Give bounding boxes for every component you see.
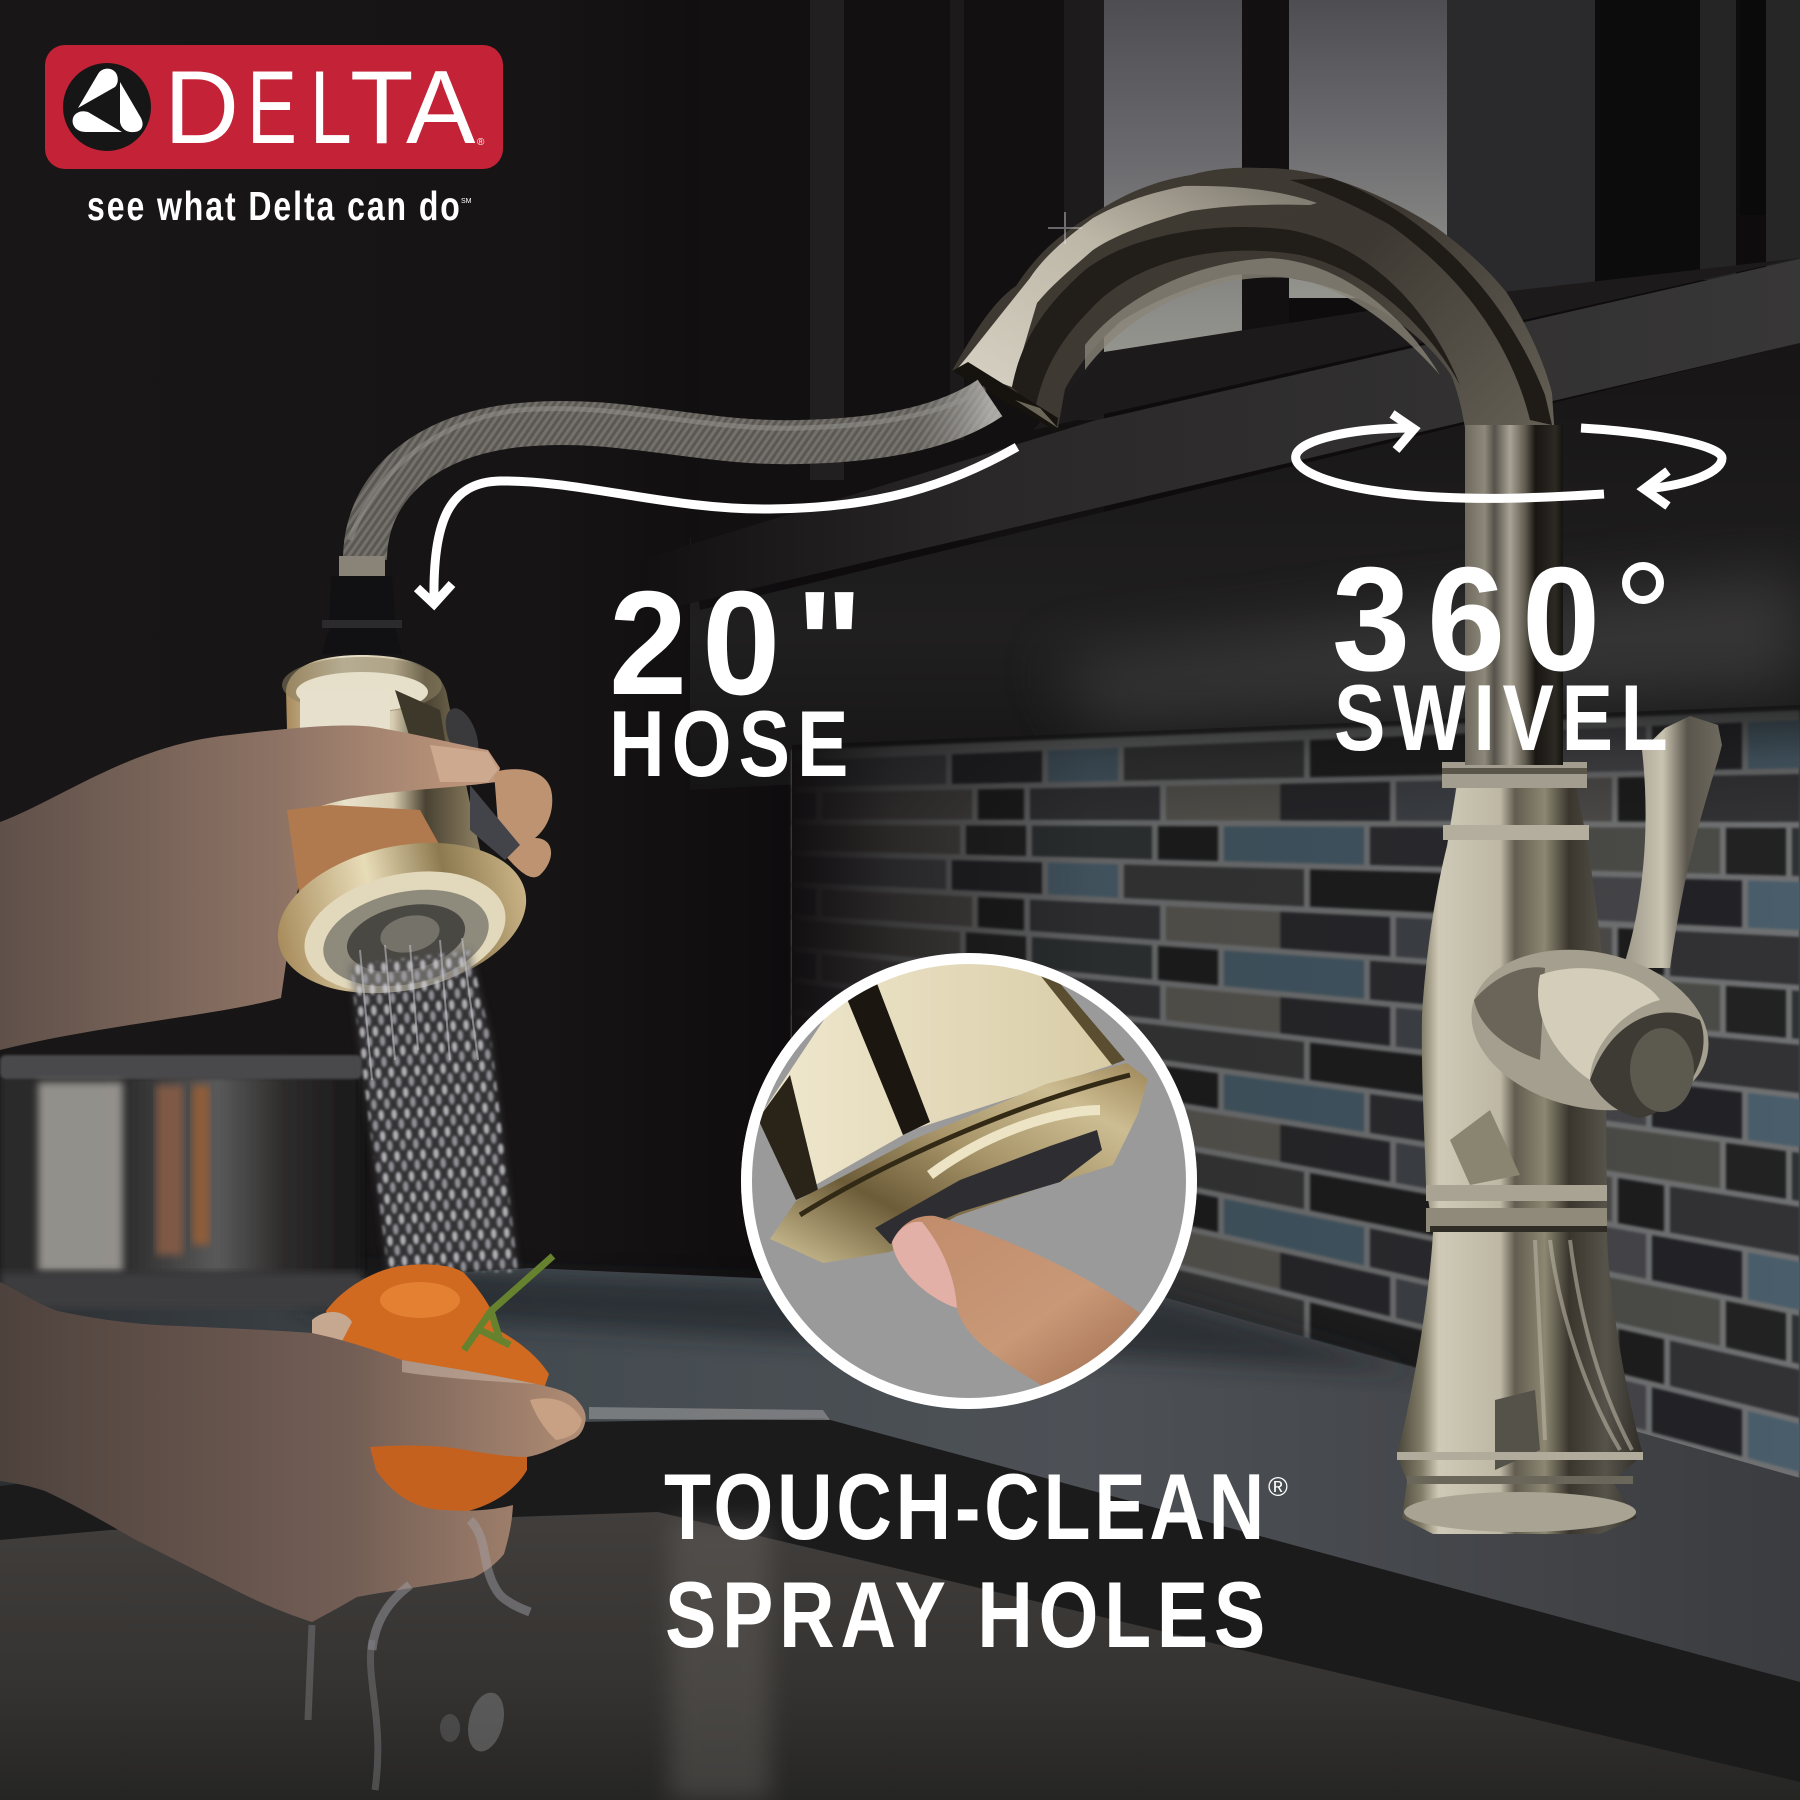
background: upper cabinets and windows bbox=[700, 0, 1800, 540]
label: touch-clean spray holes: SPRAY HOLES bbox=[665, 1563, 1265, 1668]
label: touch-clean spray holes: ® bbox=[1268, 1472, 1288, 1502]
background: mosaic tile backsplash bbox=[792, 705, 1800, 1490]
logo: Delta badge: E bbox=[247, 50, 297, 166]
label: 20 inch hose: HOSE bbox=[609, 692, 848, 797]
background: stone countertop bbox=[0, 1268, 1800, 1800]
faucet: base body and collar bbox=[1397, 762, 1643, 1534]
label: 360 degree swivel: SWIVEL bbox=[1334, 666, 1668, 771]
inset: flared rim bbox=[770, 1063, 1148, 1263]
background: shelf ledge bbox=[640, 259, 1800, 790]
inset: fingertip bbox=[892, 1216, 1140, 1388]
hose: braided pull-down line bbox=[350, 388, 990, 560]
logo: Delta badge: T bbox=[350, 50, 414, 166]
inset circle: touch-clean spray holes close-up bbox=[741, 940, 1197, 1409]
arrow: 360 swivel rotation bbox=[1296, 414, 1722, 506]
spray head: connector and body bbox=[282, 556, 485, 850]
inset: sprayer body bbox=[760, 964, 1118, 1184]
logo: Delta badge bbox=[45, 45, 503, 169]
label: 20 inch hose: 20" bbox=[609, 560, 863, 726]
upper hand holding spray head bbox=[0, 726, 552, 1050]
lower hand cupping tomato bbox=[0, 1282, 586, 1790]
label: touch-clean spray holes: TOUCH-CLEAN bbox=[664, 1455, 1264, 1560]
label: 360 degree swivel: 360 bbox=[1332, 536, 1600, 702]
logo: triangle emblem bbox=[63, 63, 151, 151]
faucet: arched spout bbox=[952, 168, 1563, 765]
logo tagline: see what Delta can do bbox=[87, 183, 460, 229]
logo tagline: SM bbox=[461, 198, 472, 205]
logo: Delta badge: ® bbox=[477, 137, 485, 148]
arrow: hose extension bbox=[417, 447, 1017, 604]
background: sink rim and basin bbox=[0, 1407, 1800, 1800]
logo: Delta badge: D bbox=[164, 50, 239, 166]
label: touch-clean spray holes bbox=[664, 1455, 1288, 1668]
spray head: face plate with spray holes bbox=[264, 821, 540, 1015]
logo: Delta badge: A bbox=[406, 50, 476, 166]
label: 360 degree swivel bbox=[1332, 536, 1668, 771]
background: steel pot bbox=[0, 1055, 362, 1308]
faucet: handle lever and hub bbox=[1456, 716, 1724, 1131]
logo: Delta badge: L bbox=[310, 50, 352, 166]
inset: spray hole nozzles bbox=[875, 1130, 1102, 1244]
vegetable: orange tomato bbox=[326, 1256, 553, 1514]
water spray bbox=[350, 938, 518, 1272]
